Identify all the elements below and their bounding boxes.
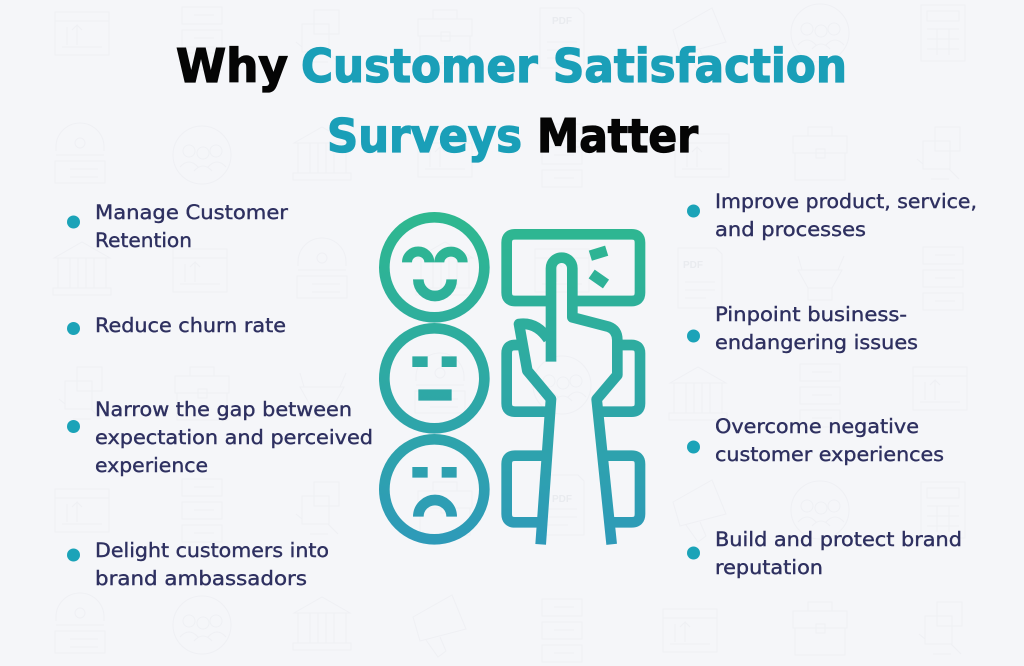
bullet: overcome negative experiences: customer experiences	[715, 443, 944, 466]
bullet: narrow the gap: expectation and perceived	[95, 426, 373, 449]
bullet: narrow the gap: experience	[95, 454, 208, 477]
title: Why	[176, 39, 288, 93]
bullet: manage customer retention	[67, 201, 289, 252]
title: Matter	[537, 109, 698, 163]
bullet: overcome negative experiences: Overcome negative	[715, 415, 919, 438]
faint PDF watermark labels: PDF	[552, 494, 572, 505]
icon: hand	[519, 258, 617, 544]
faint PDF watermark labels	[552, 16, 703, 505]
bullet: pinpoint issues: endangering issues	[715, 331, 918, 354]
icon: bottom button	[507, 456, 640, 522]
bullet: overcome negative experiences	[687, 415, 944, 466]
bullet: reduce churn rate: Reduce churn rate	[95, 314, 286, 337]
icon: sad face	[384, 439, 484, 539]
right list	[687, 190, 977, 579]
faint PDF watermark labels: PDF	[552, 16, 572, 27]
central icon: smileys and hand pressing a button	[384, 217, 640, 544]
bullet: narrow the gap	[67, 398, 373, 477]
bullet: improve product	[687, 190, 977, 241]
bullet: delight customers: Delight customers into	[95, 539, 329, 562]
icon: top button	[507, 234, 640, 301]
title: Surveys	[327, 109, 522, 163]
bullet: build brand reputation: Build and protect brand	[715, 528, 962, 551]
bullet: manage customer retention: Retention	[95, 229, 192, 252]
bullet: build brand reputation	[687, 528, 962, 579]
title: Customer Satisfaction	[301, 39, 847, 93]
bullet: improve product: Improve product, service,	[715, 190, 977, 213]
bullet: delight customers	[67, 539, 329, 590]
left list	[67, 201, 373, 590]
bullet: build brand reputation: reputation	[715, 556, 823, 579]
bullet: delight customers: brand ambassadors	[95, 567, 307, 590]
bullet: manage customer retention: Manage Customer	[95, 201, 289, 224]
icon: happy face	[384, 217, 484, 317]
faint PDF watermark labels: PDF	[683, 260, 703, 271]
bullet: narrow the gap: Narrow the gap between	[95, 398, 352, 421]
icon: neutral face	[384, 328, 484, 428]
bullet: improve product: and processes	[715, 218, 866, 241]
bullet: pinpoint issues: Pinpoint business-	[715, 303, 907, 326]
title	[176, 39, 847, 163]
icon: middle button	[507, 345, 640, 412]
icon: tap sparks	[590, 251, 607, 284]
bullet: pinpoint issues	[687, 303, 918, 354]
